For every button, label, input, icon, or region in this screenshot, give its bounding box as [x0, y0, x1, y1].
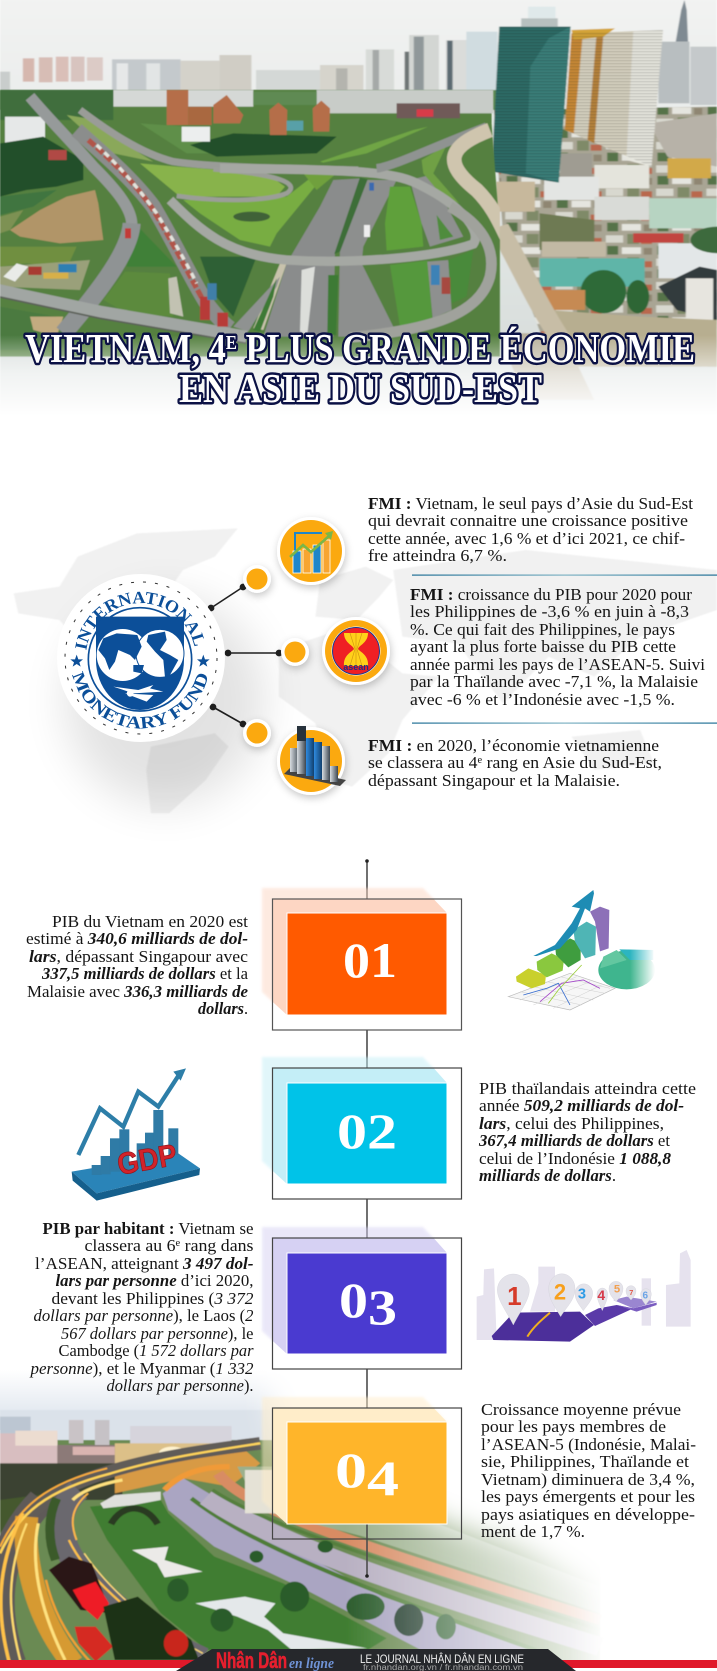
- text: step 02: celui de l’Indonésie 1 088,8: [479, 1149, 672, 1168]
- footer band: LE JOURNAL NHÂN DÂN EN LIGNE: [360, 1651, 524, 1666]
- seal text: [70, 592, 210, 729]
- text: FMI ranking: se classera au 4: [368, 753, 473, 772]
- text: step 03: [30, 1219, 254, 1395]
- seal text: MONETARY FUND: [72, 670, 207, 729]
- icon: numbered road: 6: [643, 1290, 649, 1301]
- park: [90, 1500, 387, 1650]
- text: step 01: 337,5 milliards de dollars et la: [41, 964, 248, 983]
- divider 1: [412, 574, 717, 576]
- step 01: 01: [343, 932, 397, 988]
- dot marker 3: [243, 719, 271, 747]
- text: FMI Vietnam: qui devrait connaitre une croissance positive: [368, 511, 688, 530]
- text: FMI Vietnam: FMI : Vietnam, le seul pays d’Asie du Sud-Est: [368, 494, 693, 513]
- text: step 01: PIB du Vietnam en 2020 est: [52, 912, 248, 931]
- text: FMI Philippines: %. Ce qui fait des Philippines, le pays: [410, 620, 675, 639]
- pagodas: [167, 90, 330, 135]
- trees: [167, 1541, 456, 1639]
- step 04: [262, 1397, 462, 1539]
- step 02: [262, 1057, 462, 1199]
- text: step 04: sie, Philippines, Thaïlande et: [481, 1452, 689, 1471]
- text: step 03: lars par personne d’ici 2020,: [56, 1271, 254, 1290]
- text: step 03: dollars par personne), le Laos (2: [34, 1306, 254, 1325]
- text: step 03: 567 dollars par personne), le: [61, 1324, 254, 1343]
- title: EN ASIE DU SUD-EST: [179, 365, 542, 411]
- icon: GDP chart: GDP: [115, 1138, 180, 1182]
- text: step 03: devant les Philippines (3 372: [52, 1289, 254, 1308]
- text: step 03: PIB par habitant : Vietnam se: [42, 1219, 254, 1238]
- footer band: [0, 1648, 717, 1671]
- icon: numbered road: 5: [614, 1284, 620, 1296]
- text: FMI Vietnam: cette année, avec 1,6 % et d’ici 2021, ce chif-: [368, 529, 685, 548]
- seal text: INTERNATIONAL: [75, 592, 204, 650]
- icon: numbered road: 1: [507, 1281, 522, 1311]
- timeline line: [365, 859, 369, 1578]
- right haze over bottom photo: [260, 1340, 717, 1671]
- icon: 3D bar chart and pie: [508, 890, 655, 1010]
- step 04: 0: [335, 1442, 360, 1498]
- skyline base: [113, 90, 253, 107]
- text: step 04: Vietnam) diminuera de 3,4 %,: [481, 1470, 695, 1489]
- text: FMI Philippines: ayant la plus forte baisse du PIB cette: [410, 637, 676, 656]
- step 02: 02: [337, 1103, 397, 1159]
- interchange area: [0, 90, 507, 357]
- text: step 01: Malaisie avec 336,3 milliards de: [27, 982, 248, 1001]
- text: FMI Philippines: FMI : croissance du PIB pour 2020 pour: [410, 585, 692, 604]
- icon: growth chart: [277, 517, 345, 585]
- IMF logo: [56, 574, 274, 814]
- text: FMI Philippines: [410, 585, 705, 709]
- flyover ramps: [0, 127, 507, 343]
- title: [25, 325, 695, 411]
- left ground: [0, 90, 113, 350]
- text: step 01: [26, 912, 248, 1018]
- left roads: [0, 1500, 42, 1663]
- text: step 03: rang dans: [180, 1236, 254, 1255]
- icon: GDP chart: [72, 1068, 200, 1201]
- seal emblem: [88, 608, 192, 711]
- text: step 03: l’ASEAN, atteignant 3 497 dol-: [35, 1254, 254, 1273]
- hero photo: highway interchange and skyline: [0, 0, 717, 420]
- text: FMI Philippines: les Philippines de -3,6 % en juin à -8,3: [410, 602, 689, 621]
- green glass tower: [491, 7, 571, 183]
- text: step 04: pays asiatiques en développe-: [481, 1505, 695, 1524]
- dot marker 1: [243, 565, 271, 593]
- text: step 04: ment de 1,7 %.: [481, 1522, 585, 1541]
- step 03: [262, 1227, 462, 1369]
- light trails: [0, 1443, 260, 1663]
- mid-rise towers: [0, 0, 717, 118]
- text: step 01: dollars.: [198, 999, 248, 1018]
- icon: numbered road: [477, 1250, 691, 1342]
- text: step 04: [481, 1400, 696, 1541]
- icon: numbered road: 2: [554, 1279, 566, 1304]
- icon: bar skyline: [277, 726, 346, 795]
- text: FMI Vietnam: fre atteindra 6,7 %.: [368, 546, 507, 565]
- hero fade to white: [0, 335, 717, 420]
- text: step 01: lars, dépassant Singapour avec: [29, 947, 248, 966]
- icon: ASEAN emblem: [322, 617, 390, 685]
- roads: [30, 97, 358, 333]
- far skyline: [0, 57, 325, 110]
- text: step 02: milliards de dollars.: [479, 1166, 616, 1185]
- title: E: [226, 332, 237, 354]
- ponds: [100, 1492, 161, 1508]
- icon: numbered road: 3: [578, 1286, 586, 1302]
- text: FMI Philippines: avec -6 % et l’Indonésie avec -1,5 %.: [410, 690, 675, 709]
- text: FMI ranking: FMI : en 2020, l’économie vietnamienne: [368, 736, 659, 755]
- text: step 04: Croissance moyenne prévue: [481, 1400, 681, 1419]
- text: FMI ranking: dépassant Singapour et la Malaisie.: [368, 771, 620, 790]
- orange glow area: [115, 1443, 260, 1493]
- right district: [494, 107, 717, 400]
- text: step 03: Cambodge (1 572 dollars par: [58, 1341, 254, 1360]
- roads right side: [163, 1478, 536, 1650]
- text: step 02: 367,4 milliards de dollars et: [478, 1131, 670, 1150]
- text: step 04: l’ASEAN-5 (Indonésie, Malai-: [481, 1435, 696, 1454]
- bottom photo: city at night with light trails: [0, 1370, 605, 1667]
- text: step 04: pour les pays membres de: [481, 1417, 666, 1436]
- right fade: [344, 1433, 605, 1667]
- red lit area: [49, 1557, 111, 1613]
- text: step 02: [478, 1079, 696, 1185]
- viaduct lower section: [498, 227, 560, 338]
- lawns and trees: [67, 115, 428, 330]
- divider 2: [412, 722, 717, 724]
- text: FMI Philippines: par la Thaïlande avec -7,1 %, la Malaisie: [410, 672, 698, 691]
- step 04: 4: [367, 1450, 399, 1506]
- text: FMI Vietnam: [368, 494, 693, 565]
- text: FMI Philippines: année parmi les pays de l’ASEAN-5. Suivi: [410, 655, 705, 674]
- dot marker 2: [281, 638, 309, 666]
- text: step 02: année 509,2 milliards de dol-: [479, 1096, 684, 1115]
- text: step 03: classera au 6: [84, 1236, 171, 1255]
- distant city: [0, 1417, 232, 1533]
- text: step 03: e: [176, 1238, 181, 1249]
- icon: numbered road: 4: [597, 1287, 605, 1303]
- text: step 03: dollars par personne).: [106, 1376, 254, 1395]
- residential tower: [565, 28, 663, 167]
- text: step 03: personne), et le Myanmar (1 332: [30, 1359, 254, 1378]
- carriageways: [233, 145, 473, 337]
- hedge: [50, 1498, 57, 1560]
- icon: numbered road: 7: [629, 1288, 633, 1297]
- text: FMI ranking: e: [478, 755, 483, 766]
- text: step 02: lars, celui des Philippines,: [479, 1114, 664, 1133]
- text: step 02: PIB thaïlandais atteindra cette: [479, 1079, 696, 1098]
- background world map: [14, 528, 717, 813]
- step 03: 3: [368, 1279, 397, 1335]
- icon: ASEAN emblem: asean: [343, 662, 369, 672]
- text: step 01: estimé à 340,6 milliards de dol-: [26, 929, 248, 948]
- connector lines: [208, 584, 282, 727]
- text: step 04: les pays émergents et pour les: [481, 1487, 695, 1506]
- text: FMI ranking: [368, 736, 662, 790]
- step 01: [262, 888, 462, 1030]
- step 03: 0: [339, 1272, 364, 1328]
- title: VIETNAM, 4: [25, 325, 264, 371]
- vehicles: [125, 183, 450, 327]
- text: FMI ranking: rang en Asie du Sud-Est,: [482, 753, 662, 772]
